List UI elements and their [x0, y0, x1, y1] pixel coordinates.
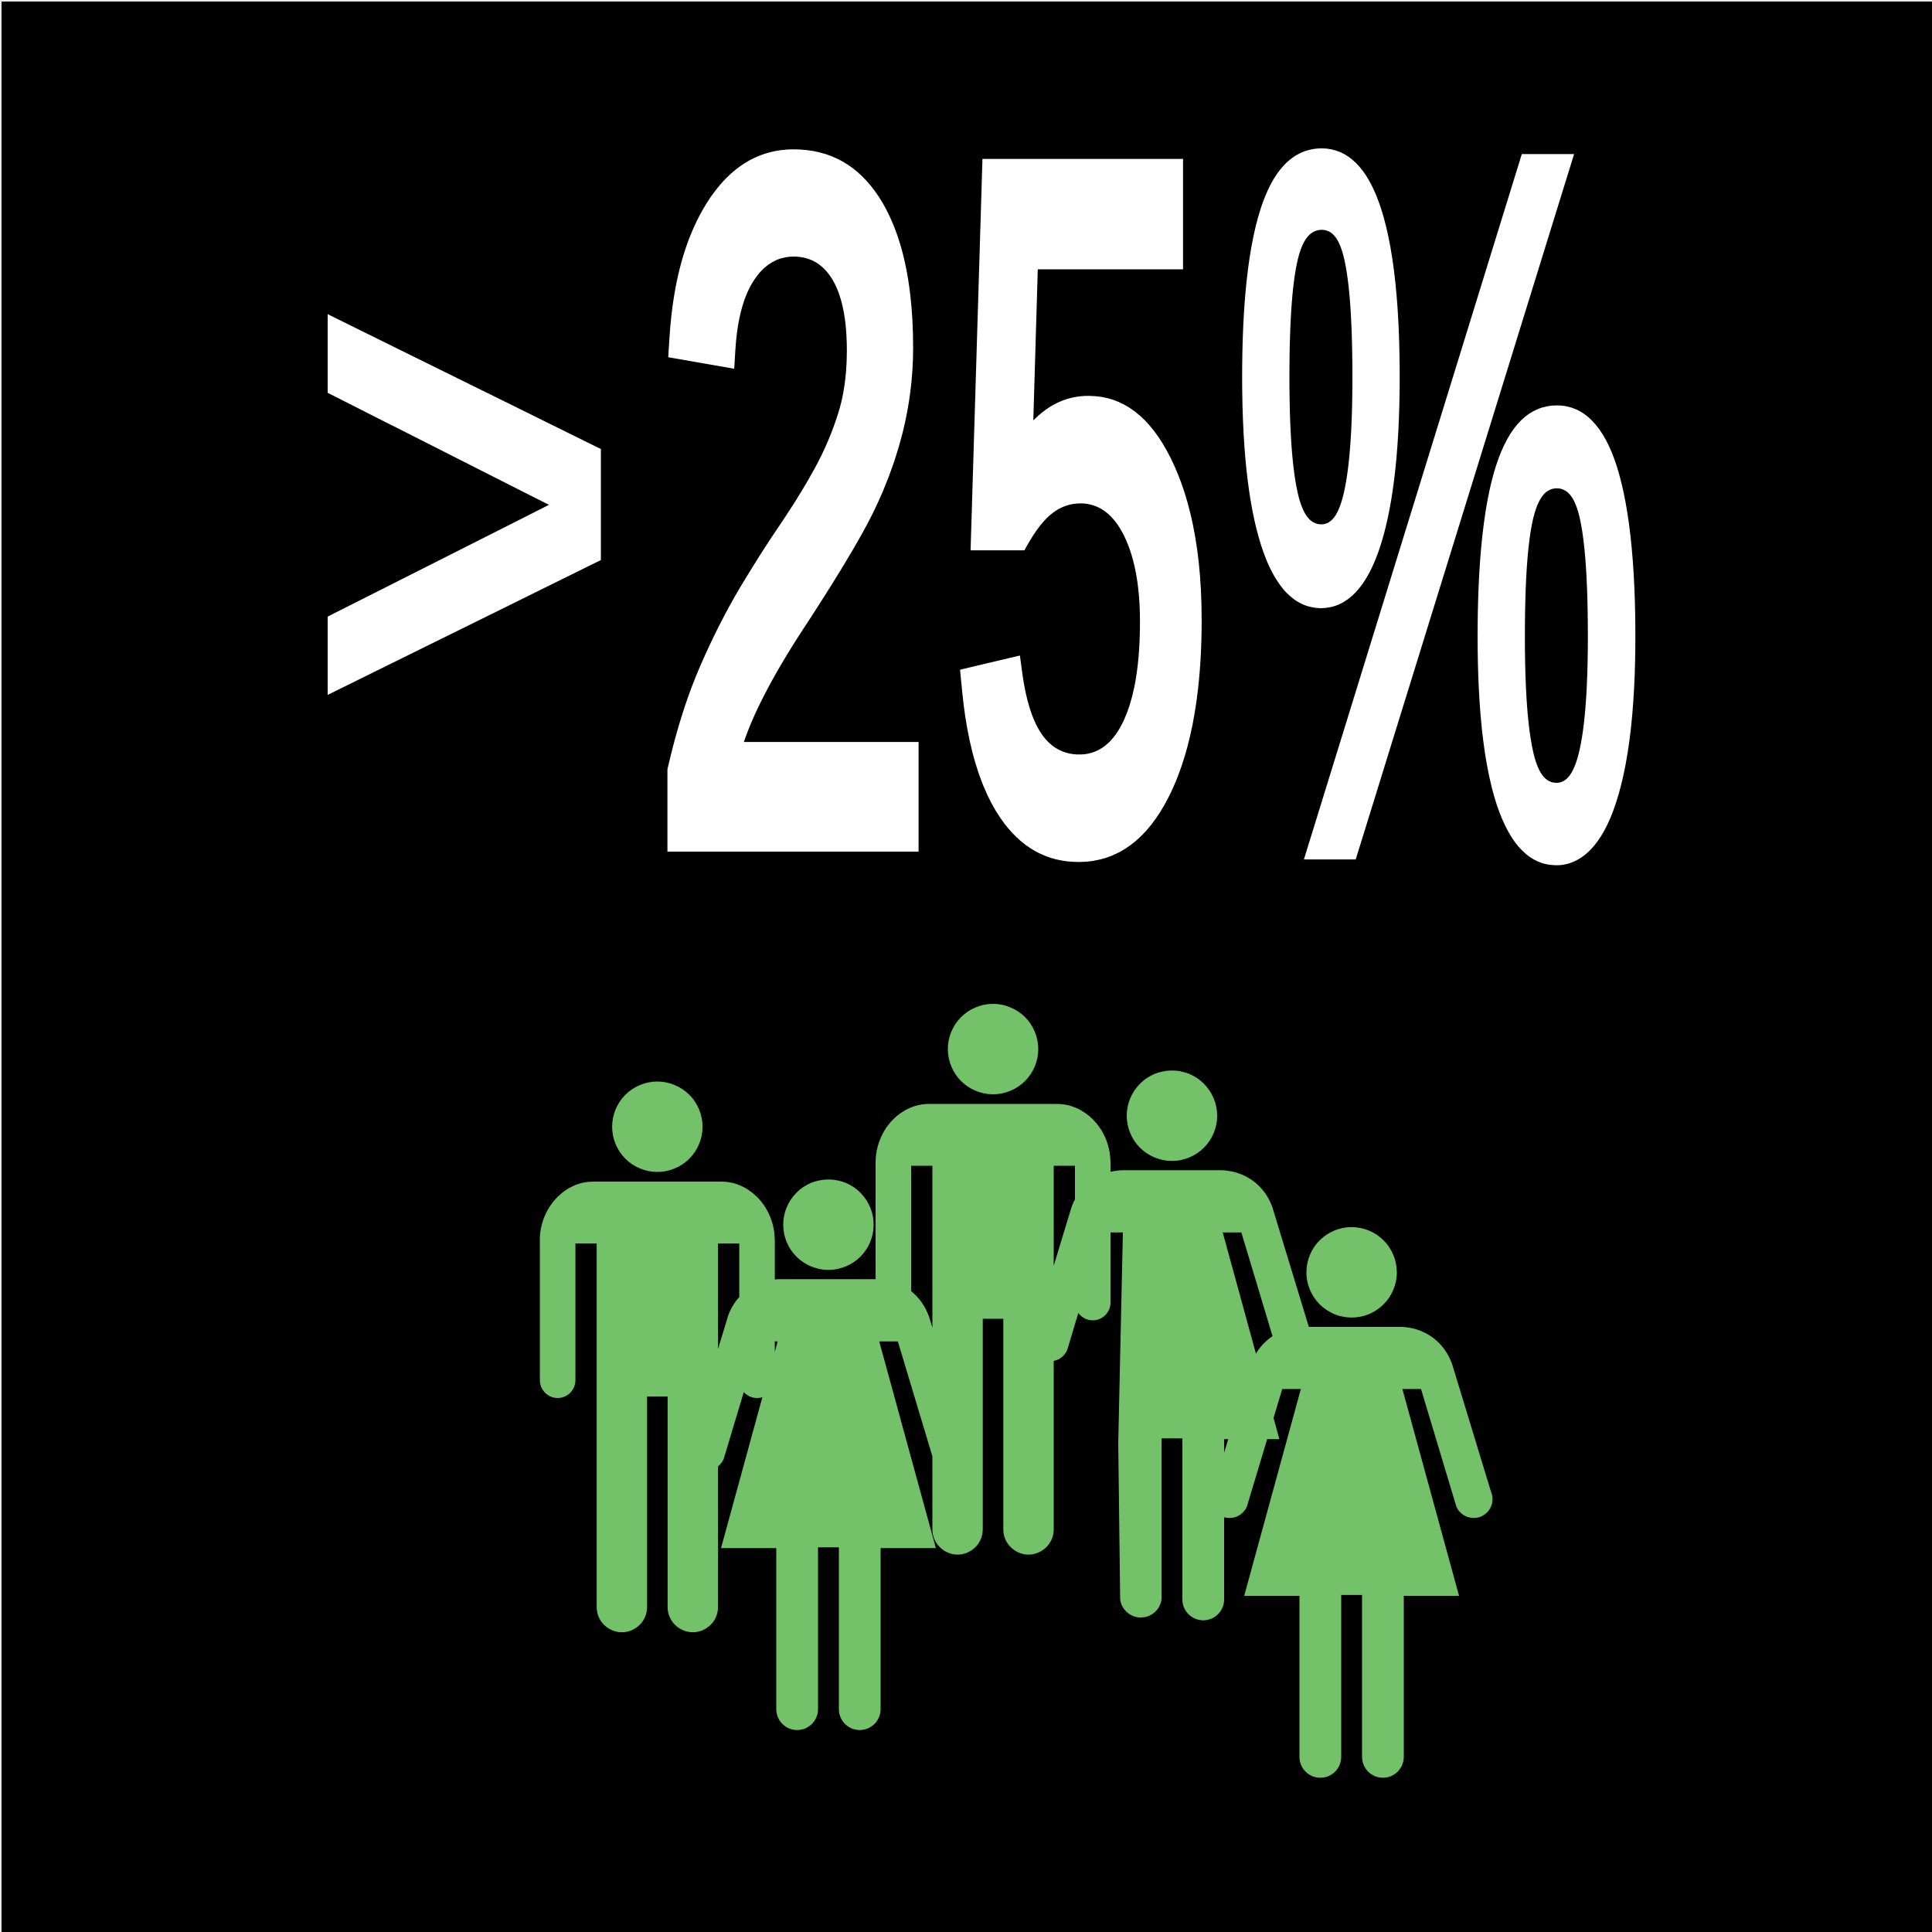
person: woman, right — [1211, 1227, 1492, 1777]
icon: group of five people — [540, 1004, 1492, 1777]
person: man, centre back — [876, 1004, 1111, 1555]
digit 2: 2 — [652, 0, 934, 1034]
headline statistic: >25% — [304, 0, 1645, 1053]
greater-than sign: > — [304, 98, 623, 888]
person: man, left — [540, 1082, 775, 1632]
person: figure with trousers, right of centre — [1031, 1070, 1313, 1621]
person: woman, centre front — [688, 1179, 969, 1730]
digit 5: 5 — [953, 0, 1212, 1036]
